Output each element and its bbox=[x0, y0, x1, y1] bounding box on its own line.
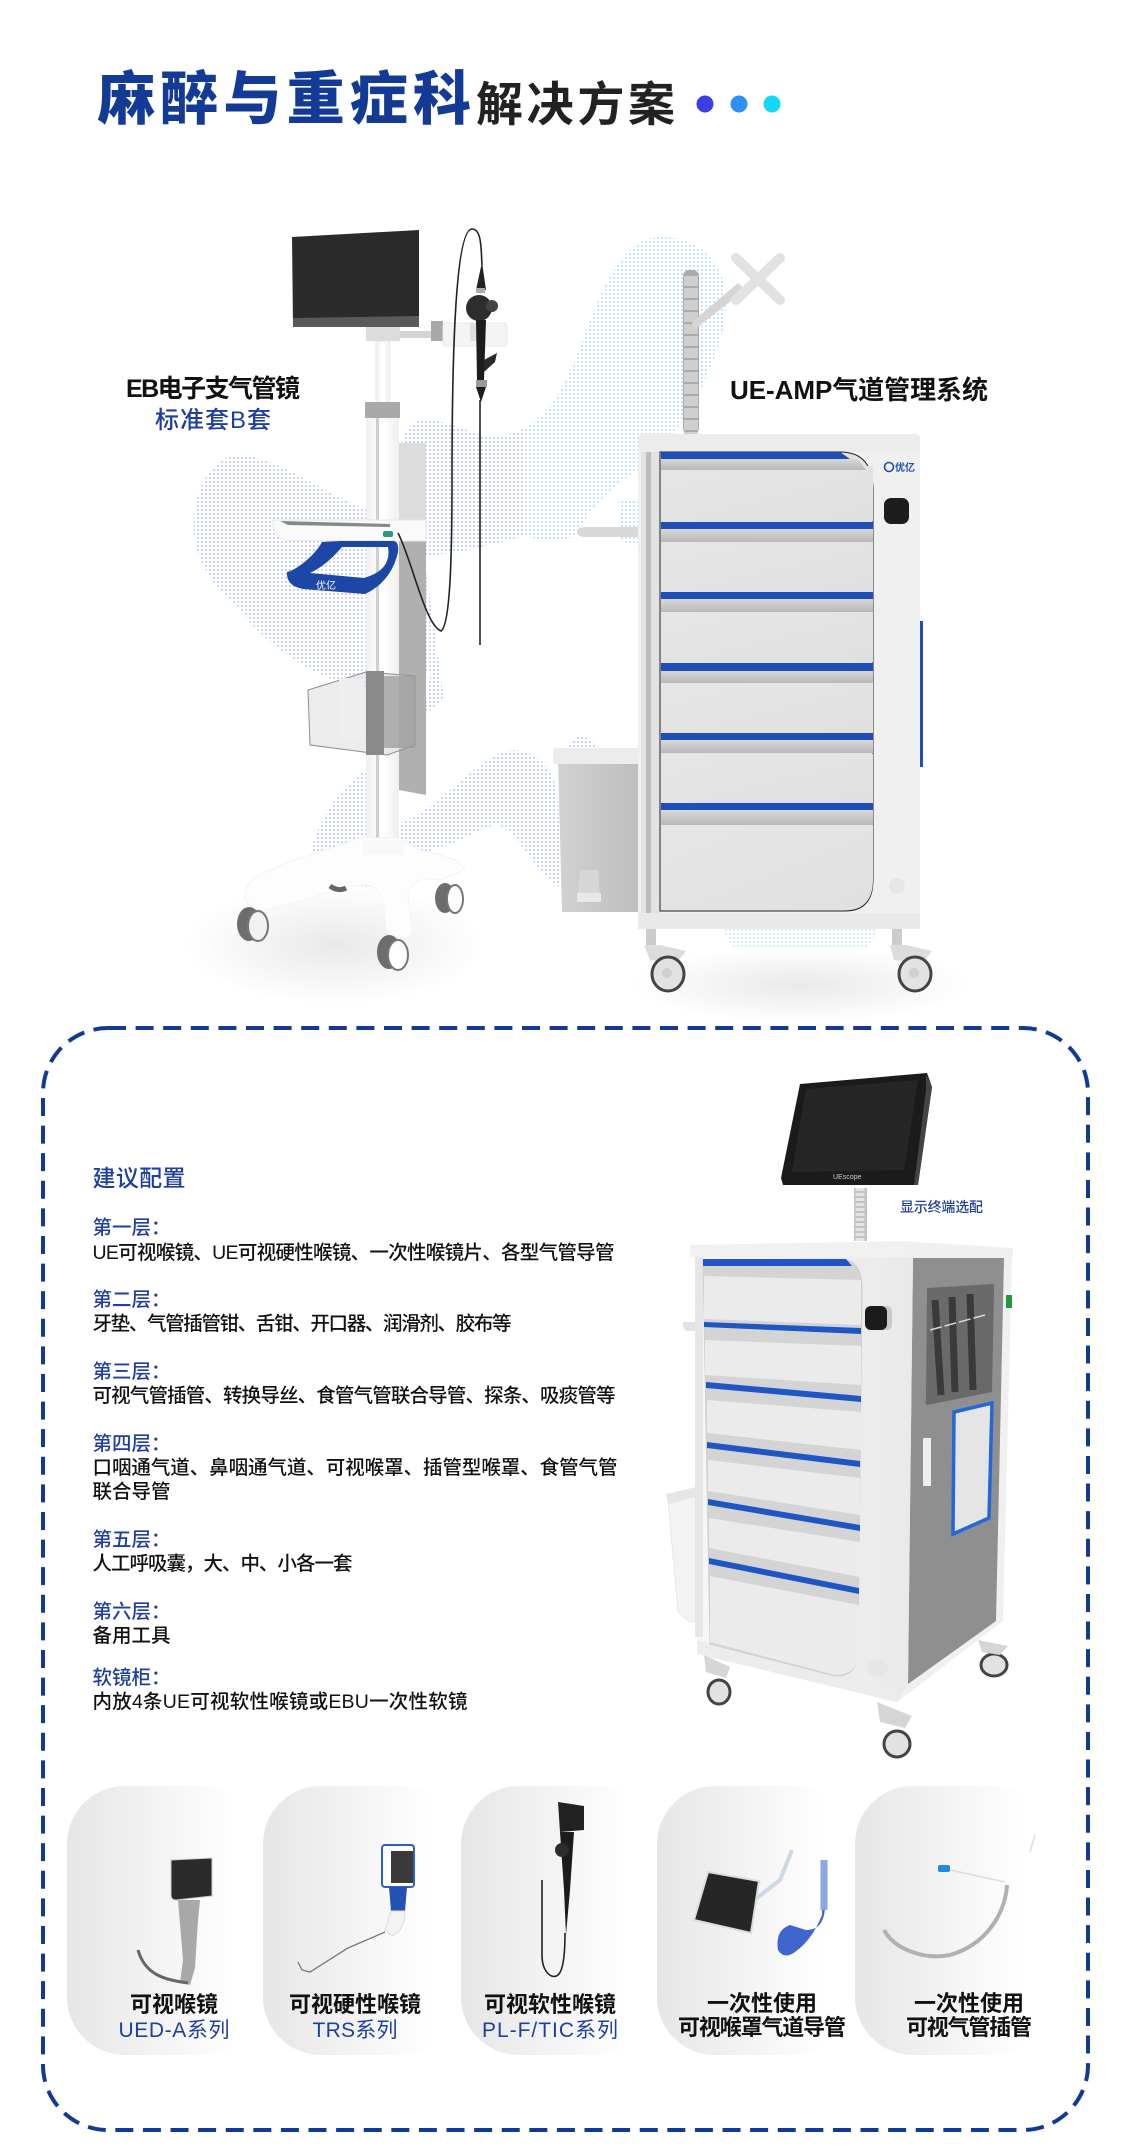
card: video laryngoscope: UED-A系列 bbox=[118, 2019, 230, 2042]
label: EB bronchoscope set: 标准套B套 bbox=[155, 407, 271, 434]
icon: flexible scope bbox=[542, 1802, 584, 1976]
layer 5: 人工呼吸囊，大、中、小各一套 bbox=[92, 1553, 352, 1575]
card: disposable video LMA: 可视喉罩气道导管 bbox=[678, 2015, 846, 2040]
casters bbox=[237, 883, 463, 970]
casters bbox=[704, 1640, 1008, 1757]
title: 解决方案 bbox=[476, 78, 675, 131]
layer 4: 口咽通气道、鼻咽通气道、可视喉罩、插管型喉罩、食管气管 bbox=[92, 1457, 618, 1479]
front face bbox=[690, 1241, 913, 1702]
layer 1: 第一层： bbox=[92, 1217, 171, 1239]
card: video laryngoscope bbox=[67, 1786, 264, 2055]
scope body bbox=[466, 262, 498, 402]
layer 6 bbox=[92, 1601, 171, 1647]
monitor arm bbox=[366, 321, 507, 346]
keypad bbox=[884, 498, 909, 524]
casters bbox=[644, 929, 932, 991]
layer 5 bbox=[92, 1529, 352, 1575]
speaker bbox=[868, 1659, 888, 1677]
icon: tablet and laryngeal mask bbox=[694, 1850, 825, 1956]
side panel bbox=[897, 1241, 1013, 1702]
neck bbox=[854, 1188, 867, 1241]
green tag bbox=[1006, 1295, 1012, 1308]
card: disposable video intubation tube: 可视气管插管 bbox=[906, 2015, 1032, 2040]
monitor bbox=[292, 230, 419, 327]
card: rigid video laryngoscope bbox=[263, 1786, 460, 2055]
wave background bbox=[194, 237, 877, 975]
panel: suggested configuration bbox=[43, 1028, 1088, 2130]
label: display option: 显示终端选配 bbox=[900, 1199, 983, 1215]
display terminal: UEscope bbox=[833, 1174, 862, 1181]
icon: three title dots bbox=[696, 96, 780, 112]
card: flexible video laryngoscope bbox=[461, 1786, 658, 2055]
logo: 优亿 bbox=[895, 461, 915, 474]
card: flexible video laryngoscope: PL-F/TIC系列 bbox=[482, 2019, 618, 2042]
card: disposable video LMA: 一次性使用 bbox=[707, 1991, 817, 2016]
trash can bbox=[553, 748, 640, 912]
drawers bbox=[703, 1259, 862, 1676]
layer 3 bbox=[92, 1361, 616, 1407]
layer 2 bbox=[92, 1289, 512, 1335]
scope cable bbox=[398, 229, 482, 645]
speaker bbox=[889, 878, 905, 894]
layer 2: 第二层： bbox=[92, 1289, 171, 1311]
card: flexible video laryngoscope: 可视软性喉镜 bbox=[484, 1992, 616, 2017]
layer 6: 备用工具 bbox=[92, 1625, 170, 1647]
layer 4 bbox=[92, 1433, 618, 1503]
card: rigid video laryngoscope: TRS系列 bbox=[312, 2019, 398, 2042]
display terminal bbox=[781, 1073, 932, 1185]
logo bbox=[884, 461, 915, 474]
card: rigid video laryngoscope: 可视硬性喉镜 bbox=[289, 1992, 421, 2017]
icon: endotracheal tube bbox=[884, 1835, 1035, 1956]
product: EB bronchoscope stand bbox=[237, 229, 507, 970]
keypad bbox=[865, 1306, 892, 1330]
tray bbox=[273, 520, 426, 541]
blue frame bbox=[953, 1403, 992, 1534]
layer 1: UE可视喉镜、UE可视硬性喉镜、一次性喉镜片、各型气管导管 bbox=[92, 1242, 614, 1264]
scope window bbox=[926, 1284, 994, 1405]
trash bbox=[666, 1486, 700, 1622]
blue head band: 优亿 bbox=[316, 579, 336, 592]
pole bbox=[365, 341, 400, 842]
side handle bbox=[577, 527, 638, 537]
blue head band bbox=[287, 541, 398, 594]
title bbox=[97, 67, 675, 132]
card: disposable video intubation tube: 一次性使用 bbox=[914, 1991, 1024, 2016]
back panel bbox=[399, 443, 426, 795]
card: disposable video LMA bbox=[657, 1786, 854, 2055]
flexible scope cabinet: 软镜柜： bbox=[92, 1667, 171, 1689]
card: disposable video intubation tube bbox=[855, 1786, 1052, 2055]
flexible scope cabinet bbox=[92, 1667, 468, 1713]
product: cart three-quarter view bbox=[666, 1073, 1013, 1757]
basket bbox=[308, 671, 415, 755]
base bbox=[245, 837, 465, 938]
card: video laryngoscope: 可视喉镜 bbox=[130, 1992, 218, 2017]
layer 4: 第四层： bbox=[92, 1433, 171, 1455]
label: EB bronchoscope set bbox=[126, 375, 300, 434]
cabinet body bbox=[638, 434, 920, 929]
layer 3: 可视气管插管、转换导丝、食管气管联合导管、探条、吸痰管等 bbox=[92, 1385, 616, 1407]
latch bbox=[923, 1438, 931, 1486]
layer 5: 第五层： bbox=[92, 1529, 171, 1551]
drawers bbox=[661, 452, 873, 910]
side blue strip bbox=[920, 621, 923, 767]
label: EB bronchoscope set: EB电子支气管镜 bbox=[126, 375, 300, 403]
pole and vesa mount bbox=[683, 258, 780, 434]
config list bbox=[92, 1217, 618, 1713]
layer 3: 第三层： bbox=[92, 1361, 171, 1383]
product: UE-AMP cart front view bbox=[553, 258, 932, 991]
icon: rigid laryngoscope bbox=[298, 1845, 414, 1972]
label: UE-AMP system: UE-AMP气道管理系统 bbox=[730, 375, 988, 405]
layer 4: 联合导管 bbox=[92, 1481, 170, 1503]
layer 6: 第六层： bbox=[92, 1601, 171, 1623]
floor shadows bbox=[185, 885, 970, 1023]
layer 1 bbox=[92, 1217, 614, 1264]
handle bbox=[683, 1322, 698, 1331]
title: 麻醉与重症科 bbox=[97, 67, 471, 132]
layer 2: 牙垫、气管插管钳、舌钳、开口器、润滑剂、胶布等 bbox=[92, 1313, 512, 1335]
flexible scope cabinet: 内放4条UE可视软性喉镜或EBU一次性软镜 bbox=[92, 1691, 468, 1713]
heading: suggested configuration: 建议配置 bbox=[92, 1165, 186, 1191]
icon: laryngoscope bbox=[138, 1858, 212, 1985]
